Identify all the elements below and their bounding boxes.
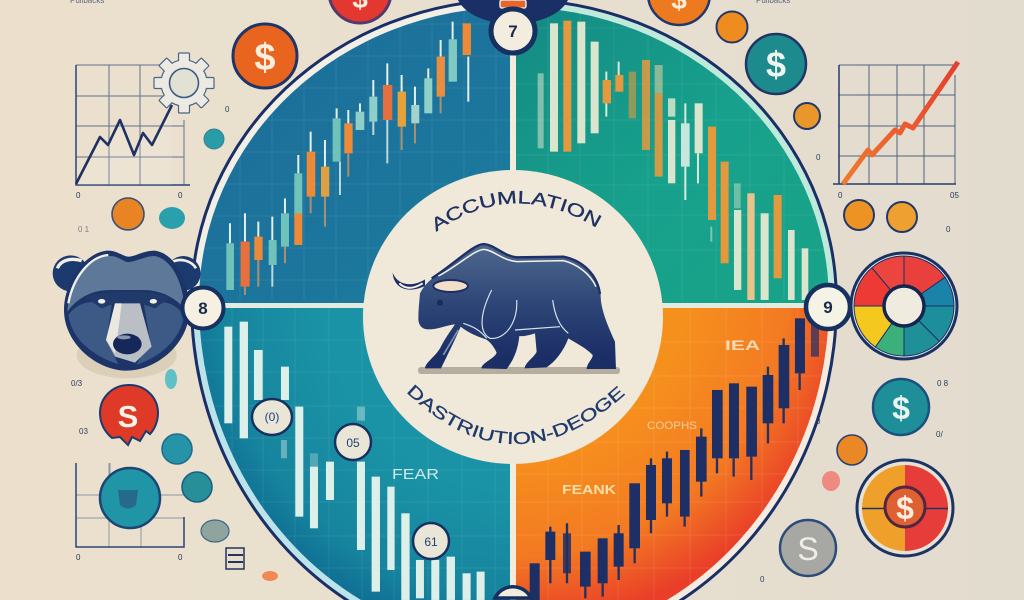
icon: teal coin [100, 468, 160, 528]
candlesticks: falling, green quadrant [538, 21, 808, 300]
numbered badge: 9: 9 [823, 298, 833, 317]
small tick labels: 0 [816, 153, 821, 162]
chart with teal coin: bottom left: 0 [178, 553, 183, 562]
numbered badges on teal quadrant: (0) [265, 410, 279, 424]
coin: orange top [648, 0, 710, 25]
small tick labels: 0/ [936, 430, 943, 439]
numbered badge: 8: 8 [198, 299, 208, 318]
small tick labels [71, 105, 951, 584]
line chart with gear: top left: 0 [76, 191, 81, 200]
numbered badge: 7 [458, 0, 568, 53]
white bars: teal quadrant [224, 322, 485, 600]
quadrant grid lines [190, 0, 510, 300]
coin: red S [100, 385, 158, 445]
numbered badge: bottom [495, 587, 531, 598]
coin: orange dollar [233, 24, 297, 88]
icon: dollar pie [857, 460, 953, 556]
coin: teal dollar: $ [766, 44, 786, 85]
inner ring [180, 0, 848, 600]
chart with teal coin: bottom left [76, 463, 184, 562]
small tick labels: 0 8 [937, 379, 949, 388]
fear labels: FEANK [562, 482, 617, 497]
coin: grey S [780, 520, 836, 576]
coin: teal lower [182, 472, 212, 502]
coin: gold right [887, 202, 917, 232]
small tick labels: 0 [760, 575, 765, 584]
coin: orange dollar: $ [254, 37, 276, 79]
ground shadow [418, 367, 620, 374]
icon: gear [154, 53, 214, 113]
fear labels [392, 337, 760, 497]
center medallion [363, 170, 663, 464]
icon: list [226, 548, 244, 569]
icon: color wheel [851, 253, 957, 359]
coin: small gold [794, 103, 820, 129]
disc outline [190, 0, 838, 600]
quadrant: green [516, 0, 836, 303]
line chart with gear: top left: 0 [178, 191, 183, 200]
coin: teal oval [159, 207, 185, 229]
numbered badges on teal quadrant [252, 399, 449, 559]
coin: red top [329, 0, 391, 23]
coin: orange small right [837, 435, 867, 465]
top small captions [70, 0, 790, 5]
small tick labels: 0 [225, 105, 230, 114]
numbered badge: 7: 7 [508, 22, 518, 41]
chart line: red rising [843, 62, 958, 184]
numbered badges on teal quadrant: 05 [346, 436, 360, 450]
small tick labels: 0 [946, 225, 951, 234]
chart with teal coin: bottom left: 0 [76, 553, 81, 562]
quadrant: orange [516, 308, 836, 600]
icon: bear head [53, 251, 201, 378]
numbered badge: 9 [806, 285, 850, 329]
quadrant: accumulation blue [190, 0, 510, 303]
center circle [363, 170, 663, 464]
small tick labels: 03 [79, 427, 88, 436]
coin: teal dollar [746, 34, 806, 94]
fear labels: COOPHS [647, 420, 697, 432]
fear labels: IEA [725, 337, 760, 353]
small tick labels: 0/3 [71, 379, 83, 388]
heading: accumulation: ACCUMLATION [434, 190, 602, 232]
dark candles: orange quadrant [530, 318, 819, 600]
line chart with gear: top left [76, 53, 214, 200]
coin: teal dollar right: $ [892, 390, 910, 426]
line chart: top right: 05 [950, 191, 959, 200]
coin: small teal [204, 129, 224, 149]
candlesticks: rising, blue quadrant [226, 22, 471, 295]
chart line [76, 105, 172, 184]
coin: faded blob [201, 520, 229, 542]
coin: small orange [716, 12, 748, 42]
coin: orange left [112, 198, 144, 230]
coin: teal left [162, 434, 192, 464]
blob: orange [262, 571, 278, 581]
blob: red [822, 471, 840, 491]
line chart: top right [833, 62, 959, 200]
icon: bull [393, 244, 616, 369]
vertical divider [510, 0, 516, 600]
quadrants [190, 0, 836, 600]
blob: teal [165, 369, 177, 389]
small tick labels: 0 [816, 417, 821, 426]
coin: gold left [844, 200, 874, 230]
quadrant: teal fear [190, 308, 510, 600]
horizontal divider [196, 303, 832, 308]
coin: grey S: S [797, 531, 819, 567]
heading: distribution: DASTRIUTION-DEOGE [407, 384, 626, 444]
icon: dollar pie: $ [896, 490, 914, 526]
main cycle disc [180, 0, 848, 600]
small tick labels: 0 1 [78, 225, 90, 234]
coin: teal dollar right [873, 379, 929, 435]
fear labels: FEAR [392, 466, 439, 483]
numbered badge: 8 [182, 288, 224, 328]
numbered badges on teal quadrant: 61 [424, 535, 438, 549]
line chart: top right: 0 [838, 191, 843, 200]
coin: red S: S [118, 399, 138, 434]
